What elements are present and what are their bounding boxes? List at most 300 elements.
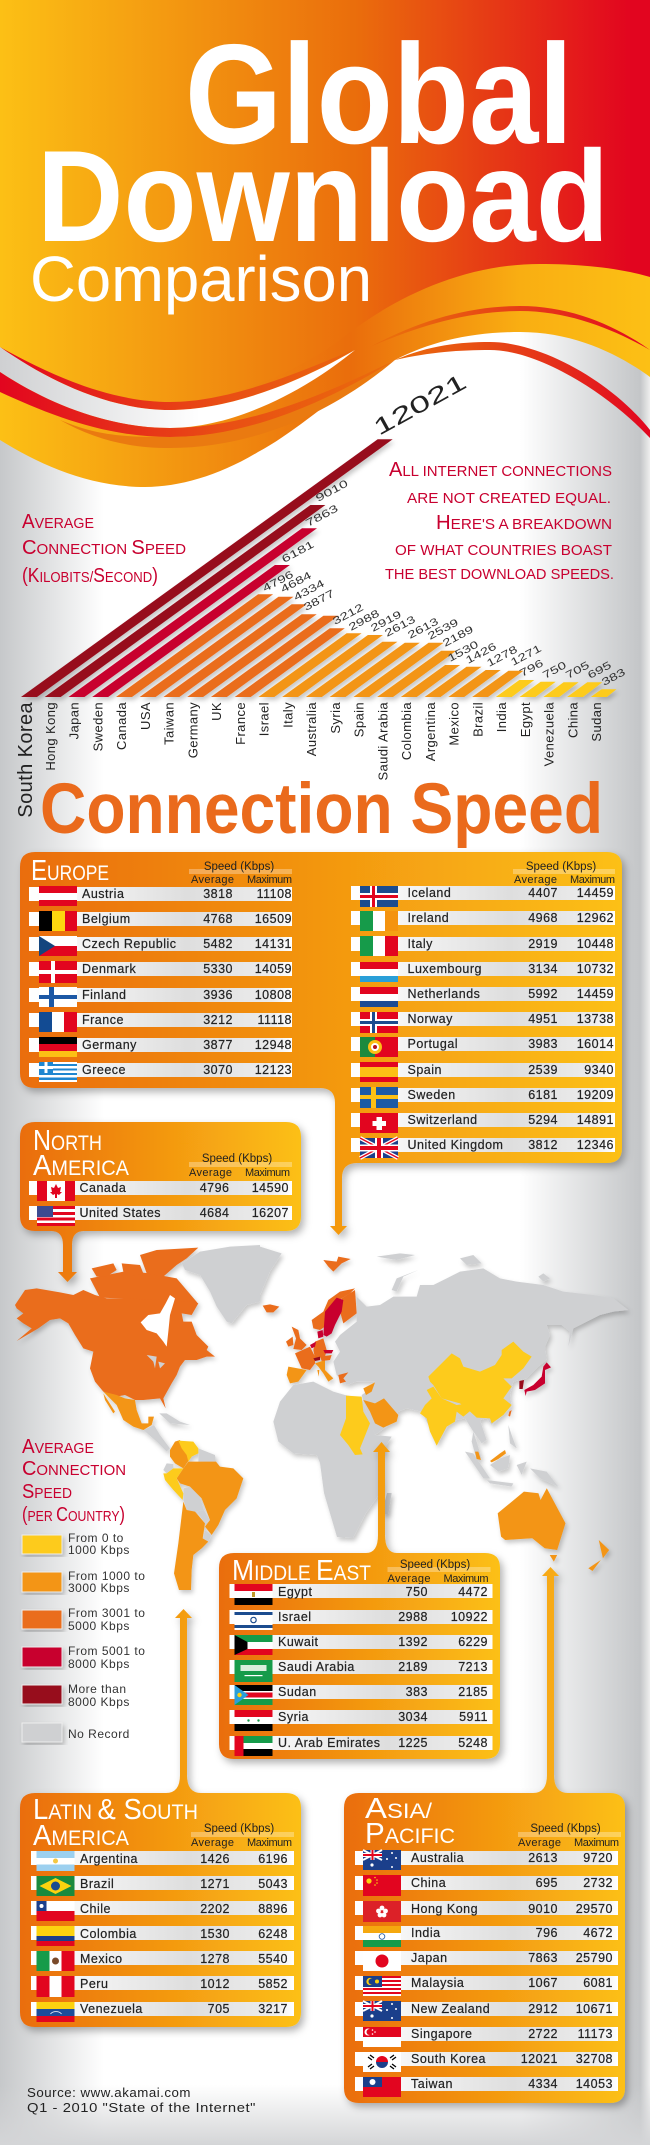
row: Sweden	[351, 1087, 615, 1108]
bar value labels: 2613	[383, 613, 418, 640]
row: Venezuela: Venezuela	[80, 2002, 143, 2016]
row: Greece: Greece	[82, 1063, 126, 1077]
row: Brazil: 1271	[200, 1877, 230, 1891]
bar country labels: UK	[209, 702, 224, 721]
row: Argentina: 6196	[258, 1852, 288, 1866]
row: China: 2732	[583, 1876, 613, 1890]
row: Sweden: 19209	[577, 1088, 614, 1102]
icon: flag Saudi Arabia	[234, 1660, 272, 1682]
row: Sweden: 6181	[528, 1088, 558, 1102]
row: Greece: 3070	[203, 1063, 233, 1077]
row: Brazil: Brazil	[80, 1877, 114, 1891]
row: Portugal: 3983	[528, 1037, 558, 1051]
icon: flag Singapore	[363, 2027, 401, 2047]
row: Israel: 2988	[398, 1610, 428, 1624]
icon: flag Peru	[36, 1976, 74, 1997]
bar country labels: Italy	[280, 702, 295, 728]
source note: Source: www.akamai.com	[27, 2085, 191, 2100]
row: Spain	[351, 1062, 615, 1082]
row: Spain: Spain	[408, 1063, 442, 1077]
legend item: no record	[22, 1723, 130, 1742]
row: New Zealand	[355, 2001, 618, 2021]
icon: flag United States	[37, 1206, 75, 1226]
intro text: HERE'S A BREAKDOWN	[436, 512, 612, 534]
row: Sudan: 383	[406, 1685, 428, 1699]
row: Malaysia: 1067	[528, 1976, 558, 1990]
row: Czech Republic: 5482	[203, 937, 233, 951]
row: Peru	[31, 1976, 294, 1997]
bar chart: average connection speed	[15, 368, 628, 818]
row: Japan: 25790	[576, 1951, 613, 1965]
row: South Korea: South Korea	[411, 2052, 486, 2066]
row: Austria	[29, 886, 292, 906]
row: United Kingdom: 3812	[528, 1138, 558, 1152]
row: Australia: 9720	[583, 1851, 613, 1865]
icon: flag United Arab Emirates	[234, 1736, 272, 1756]
row: China: 695	[536, 1876, 558, 1890]
row: Canada	[29, 1181, 292, 1201]
row: Luxembourg: 10732	[577, 962, 614, 976]
icon: flag France	[39, 1012, 77, 1032]
row: Iceland	[351, 886, 615, 907]
bars	[21, 439, 616, 697]
panel: Europe: Average	[191, 874, 234, 886]
row: Mexico: Mexico	[80, 1952, 123, 1966]
row: Mexico: 5540	[258, 1952, 288, 1966]
bar value labels: 4796	[261, 568, 296, 595]
source note: Q1 - 2010 "State of the Internet"	[27, 2100, 256, 2115]
bar value labels: 750	[541, 659, 569, 682]
row: Sudan	[230, 1685, 492, 1705]
row: France	[29, 1012, 292, 1032]
title: Comparison	[30, 243, 372, 315]
row: Brazil	[31, 1876, 294, 1896]
row: U. Arab Emirates: 5248	[458, 1736, 488, 1750]
legend item: 0 to 1000: 1000 Kbps	[68, 1543, 130, 1557]
legend item: more than 8000	[22, 1682, 130, 1709]
chart caption: AVERAGE	[22, 511, 94, 533]
row: Sweden: Sweden	[408, 1088, 456, 1102]
row: Saudi Arabia: 2189	[398, 1660, 428, 1674]
icon: flag Australia	[363, 1850, 401, 1870]
bar country labels: China	[565, 702, 580, 738]
map: South America	[163, 1440, 243, 1590]
row: Chile: 8896	[258, 1902, 288, 1916]
row: Australia	[355, 1850, 618, 1870]
legend item: no record: No Record	[68, 1727, 130, 1741]
row: Singapore: 11173	[578, 2027, 613, 2041]
icon: flag Sweden	[360, 1087, 398, 1108]
icon: flag Chile	[36, 1901, 74, 1921]
row: Chile: Chile	[80, 1902, 111, 1916]
row: Denmark: 5330	[203, 962, 233, 976]
row: Italy	[351, 936, 615, 956]
row: Chile	[31, 1901, 294, 1921]
row: U. Arab Emirates	[230, 1736, 492, 1756]
row: France: 11118	[258, 1013, 292, 1027]
row: Switzerland: Switzerland	[408, 1113, 478, 1127]
bar country labels: Israel	[257, 702, 272, 736]
icon: flag Egypt	[234, 1584, 272, 1605]
row: Kuwait: Kuwait	[278, 1635, 319, 1649]
row: China: China	[411, 1876, 446, 1890]
icon: flag Kuwait	[234, 1635, 272, 1655]
row: Peru: 5852	[258, 1977, 288, 1991]
row: New Zealand: 2912	[528, 2002, 558, 2016]
icon: flag Colombia	[36, 1926, 74, 1946]
bar value labels: 1271	[509, 642, 544, 669]
row: China	[355, 1875, 618, 1896]
row: Luxembourg: Luxembourg	[408, 962, 482, 976]
bar value labels: 9010	[314, 478, 351, 505]
icon: flag Japan	[363, 1951, 401, 1971]
row: Czech Republic: 14131	[255, 937, 292, 951]
row: Kuwait: 1392	[398, 1635, 428, 1649]
row: Hong Kong: Hong Kong	[411, 1902, 478, 1916]
row: Ireland: 12962	[577, 911, 614, 925]
row: Portugal: 16014	[577, 1037, 614, 1051]
map: Oceania	[498, 1488, 609, 1571]
row: Iceland: 4407	[528, 886, 558, 900]
bar value labels	[261, 368, 628, 689]
panel: Asia Pacific: Speed (Kbps)	[530, 1823, 601, 1835]
legend item: 1000 to 3000	[22, 1569, 145, 1595]
legend item: 1000 to 3000: 3000 Kbps	[68, 1581, 130, 1595]
icon: flag Czech Republic	[39, 936, 77, 956]
row: Peru: Peru	[80, 1977, 108, 1991]
icon: flag South Korea	[363, 2052, 401, 2072]
row: Venezuela	[31, 2002, 294, 2022]
row: Italy: Italy	[408, 937, 433, 951]
row: Kuwait	[230, 1635, 492, 1655]
row: Venezuela: 705	[208, 2002, 230, 2016]
panel: Europe: Maximum	[247, 874, 292, 886]
row: Netherlands	[351, 987, 615, 1007]
row: Finland: 10808	[255, 988, 292, 1002]
row: Ireland: Ireland	[408, 911, 449, 925]
row: Hong Kong: 9010	[528, 1902, 558, 1916]
icon: flag Spain	[360, 1062, 398, 1082]
row: Sudan: Sudan	[278, 1685, 317, 1699]
icon: flag China	[363, 1875, 401, 1896]
icon: flag New Zealand	[363, 2001, 401, 2021]
bar country labels: USA	[138, 702, 153, 730]
row: Chile: 2202	[200, 1902, 230, 1916]
row: India: 796	[536, 1926, 558, 1940]
icon: flag Venezuela	[36, 2002, 74, 2022]
bar country labels: Spain	[352, 702, 367, 737]
intro text: OF WHAT COUNTRIES BOAST	[395, 542, 612, 559]
row: Syria: 5911	[459, 1710, 488, 1724]
chart caption	[22, 511, 186, 587]
bar country labels: Saudi Arabia	[375, 702, 390, 781]
panel: Europe: EUROPE	[31, 855, 109, 887]
row: Spain: 2539	[528, 1063, 558, 1077]
bar value labels: 1530	[446, 638, 481, 665]
legend item: 0 to 1000	[22, 1531, 130, 1557]
row: Denmark: Denmark	[82, 962, 136, 976]
row: United States: 4684	[200, 1206, 230, 1220]
row: Mexico	[31, 1951, 294, 1971]
icon: flag Finland	[39, 987, 77, 1007]
row: Australia: 2613	[528, 1851, 558, 1865]
bar value labels: 2919	[369, 608, 404, 635]
icon: flag Syria	[234, 1710, 272, 1731]
row: Kuwait: 6229	[458, 1635, 488, 1649]
intro text	[385, 459, 614, 583]
bar country labels: Japan	[67, 702, 82, 739]
row: Japan: Japan	[411, 1951, 448, 1965]
panel: Asia Pacific: PACIFIC	[365, 1818, 455, 1850]
row: Norway	[351, 1012, 615, 1033]
icon: flag Israel	[234, 1610, 272, 1630]
legend: average connection speed per country	[22, 1436, 145, 1742]
title	[30, 15, 609, 315]
bar value labels: 796	[518, 657, 546, 680]
row: Denmark: 14059	[255, 962, 292, 976]
row: Egypt: 750	[406, 1585, 428, 1599]
row: Italy: 10448	[577, 937, 614, 951]
row: Norway: Norway	[408, 1012, 453, 1026]
bar country labels: Taiwan	[162, 702, 177, 745]
chart caption: CONNECTION SPEED	[22, 537, 186, 559]
row: Switzerland: 14891	[577, 1113, 614, 1127]
row: Norway: 13738	[577, 1012, 614, 1026]
row: Iceland: Iceland	[408, 886, 451, 900]
bar country labels: Colombia	[399, 702, 414, 760]
row: Belgium: Belgium	[82, 912, 131, 926]
panel: Latin and South America: Maximum	[247, 1837, 292, 1849]
row: Netherlands: 14459	[577, 987, 614, 1001]
row: Ireland	[351, 911, 615, 931]
panel: Latin and South America: Average	[191, 1837, 234, 1849]
row: Malaysia: Malaysia	[411, 1976, 464, 1990]
row: Canada: 4796	[200, 1181, 230, 1195]
bar country labels: Germany	[185, 702, 200, 758]
row: Colombia	[31, 1926, 294, 1946]
row: Singapore: 2722	[528, 2027, 558, 2041]
row: Israel: Israel	[278, 1610, 312, 1624]
icon: flag Canada	[37, 1181, 75, 1201]
row: Venezuela: 3217	[258, 2002, 288, 2016]
row: Germany: 12948	[255, 1038, 292, 1052]
row: U. Arab Emirates: 1225	[398, 1736, 428, 1750]
row: Austria: 11108	[257, 887, 292, 901]
row: Egypt: Egypt	[278, 1585, 312, 1599]
bar country labels: Syria	[328, 702, 343, 734]
legend item: 5001 to 8000	[22, 1644, 145, 1671]
row: Czech Republic	[29, 936, 292, 956]
panel: Europe: Average	[514, 874, 557, 886]
bar value labels: 2189	[441, 623, 476, 650]
row: Finland: 3936	[203, 988, 233, 1002]
legend item: 3001 to 5000: 5000 Kbps	[68, 1619, 130, 1633]
panel: Middle East: MIDDLE EAST	[232, 1555, 371, 1587]
row: Israel	[230, 1610, 492, 1630]
row: Germany: 3877	[203, 1038, 233, 1052]
row: Brazil: 5043	[258, 1877, 288, 1891]
row: Egypt: 4472	[458, 1585, 488, 1599]
row: Canada: Canada	[80, 1181, 126, 1195]
row: Saudi Arabia	[230, 1660, 492, 1682]
bar value labels: 12021	[369, 368, 471, 440]
row: Egypt	[230, 1584, 492, 1605]
bar value labels: 705	[564, 659, 592, 682]
row: Syria: Syria	[278, 1710, 309, 1724]
row: New Zealand: New Zealand	[411, 2002, 490, 2016]
panel: Europe: Speed (Kbps)	[526, 861, 596, 873]
row: Netherlands: Netherlands	[408, 987, 480, 1001]
legend: average connection speed per country: AVERAGE	[22, 1436, 94, 1458]
row: Spain: 9340	[584, 1063, 614, 1077]
legend item: 5001 to 8000: 8000 Kbps	[68, 1657, 130, 1671]
panel: Latin and South America: LATIN & SOUTH	[33, 1794, 198, 1826]
row: South Korea: 32708	[576, 2052, 613, 2066]
icon: flag Portugal	[360, 1037, 398, 1057]
panel: North America: Speed (Kbps)	[202, 1153, 272, 1165]
row: Argentina	[31, 1851, 294, 1871]
bar value labels: 695	[586, 659, 614, 682]
row: Ireland: 4968	[528, 911, 558, 925]
bar country labels: Canada	[114, 702, 129, 750]
row: Luxembourg	[351, 962, 615, 982]
row: Iceland: 14459	[577, 886, 614, 900]
bar value labels: 1426	[464, 640, 499, 667]
icon: flag Italy	[360, 936, 398, 956]
row: United Kingdom: United Kingdom	[408, 1138, 503, 1152]
row: Hong Kong: 29570	[576, 1902, 613, 1916]
legend: average connection speed per country: (PER COUNTRY)	[22, 1504, 125, 1526]
bar value labels: 383	[600, 666, 628, 689]
row: India: India	[411, 1926, 441, 1940]
row: Singapore: Singapore	[411, 2027, 472, 2041]
panel: Asia Pacific: Average	[518, 1837, 561, 1849]
panel: North America	[20, 1122, 301, 1282]
bar value labels: 1278	[485, 643, 520, 670]
row: Saudi Arabia: Saudi Arabia	[278, 1660, 355, 1674]
panel: Asia Pacific: Maximum	[574, 1837, 619, 1849]
title: Global	[185, 15, 573, 174]
bar value labels: 2988	[347, 607, 382, 634]
row: Malaysia: 6081	[583, 1976, 613, 1990]
row: Argentina: 1426	[200, 1852, 230, 1866]
row: United Kingdom: 12346	[577, 1138, 614, 1152]
panel: Europe: Maximum	[570, 874, 615, 886]
panel: North America: Average	[189, 1167, 232, 1179]
icon: flag Luxembourg	[360, 962, 398, 982]
row: Colombia: 1530	[200, 1927, 230, 1941]
row: Taiwan: 4334	[528, 2077, 558, 2091]
row: Japan	[355, 1951, 618, 1971]
panel: Europe: Speed (Kbps)	[204, 861, 274, 873]
row: Japan: 7863	[528, 1951, 558, 1965]
row: Greece: 12123	[255, 1063, 292, 1077]
icon: flag Sudan	[234, 1685, 272, 1705]
panel: Middle East: Average	[388, 1573, 430, 1585]
row: Norway: 4951	[528, 1012, 558, 1026]
legend item: 3001 to 5000	[22, 1606, 145, 1633]
legend item: more than 8000: 8000 Kbps	[68, 1695, 130, 1709]
bar value labels: 7863	[304, 503, 341, 530]
bar value labels: 6181	[280, 539, 317, 566]
row: Switzerland: 5294	[528, 1113, 558, 1127]
icon: flag Iceland	[360, 886, 398, 907]
legend: average connection speed per country: CONNECTION	[22, 1458, 126, 1480]
bar value labels: 2539	[426, 616, 461, 643]
map: Eurasia and Africa	[260, 1247, 628, 1538]
row: Singapore	[355, 2027, 618, 2047]
row: Czech Republic: Czech Republic	[82, 937, 177, 951]
icon: flag India	[363, 1926, 401, 1947]
header wave banner	[0, 0, 650, 487]
legend item: 0 to 1000: From 0 to	[68, 1531, 124, 1545]
row: Austria: Austria	[82, 887, 124, 901]
bar country labels: Sudan	[589, 702, 604, 742]
intro text: ARE NOT CREATED EQUAL.	[407, 490, 611, 507]
icon: flag Germany	[39, 1037, 77, 1057]
row: United Kingdom	[351, 1138, 615, 1158]
row: Austria: 3818	[203, 887, 233, 901]
row: New Zealand: 10671	[576, 2002, 613, 2016]
legend item: more than 8000: More than	[68, 1682, 127, 1696]
row: Belgium: 4768	[203, 912, 233, 926]
bar country labels: France	[233, 702, 248, 745]
row: Taiwan: 14053	[576, 2077, 613, 2091]
map: North America	[15, 1245, 260, 1452]
icon: flag Argentina	[36, 1851, 74, 1871]
row: Sudan: 2185	[458, 1685, 488, 1699]
panel: North America: Maximum	[245, 1167, 290, 1179]
row: Hong Kong	[355, 1901, 618, 1922]
row: South Korea: 12021	[521, 2052, 558, 2066]
panel: Middle East: Speed (Kbps)	[400, 1559, 470, 1571]
row: France: 3212	[203, 1013, 233, 1027]
icon: flag Brazil	[36, 1876, 74, 1896]
icon: flag United Kingdom	[360, 1138, 398, 1158]
row: Colombia: Colombia	[80, 1927, 137, 1941]
icon: flag Denmark	[39, 961, 77, 983]
row: Malaysia	[355, 1976, 618, 1996]
title: Download	[37, 123, 609, 269]
heading: connection speed: Connection Speed	[40, 770, 603, 849]
panel: Middle East: Maximum	[444, 1573, 488, 1585]
bar country labels: Sweden	[90, 702, 106, 751]
bar value labels: 4334	[292, 577, 327, 604]
icon: flag Netherlands	[360, 987, 398, 1007]
icon: flag Taiwan	[363, 2077, 401, 2097]
row: Saudi Arabia: 7213	[458, 1660, 488, 1674]
row: U. Arab Emirates: U. Arab Emirates	[278, 1736, 380, 1750]
row: Luxembourg: 3134	[528, 962, 558, 976]
row: Taiwan	[355, 2077, 618, 2097]
legend: average connection speed per country: SPEED	[22, 1481, 72, 1503]
panel: Asia Pacific: ASIA/	[365, 1793, 432, 1825]
row: United States: 16207	[252, 1206, 289, 1220]
bar country labels: South Korea	[15, 702, 37, 818]
icon: flag Switzerland	[360, 1113, 398, 1133]
row: Canada: 14590	[252, 1181, 289, 1195]
icon: flag Malaysia	[363, 1976, 401, 1996]
bar value labels: 3212	[331, 601, 366, 628]
row: Germany	[29, 1037, 292, 1057]
panel: Latin and South America	[20, 1609, 301, 2027]
panel: North America: AMERICA	[33, 1150, 129, 1182]
row: United States	[29, 1206, 292, 1226]
row: Portugal: Portugal	[408, 1037, 458, 1051]
world map	[15, 1245, 628, 1590]
icon: flag Greece	[39, 1062, 77, 1082]
bar value labels: 2613	[406, 615, 441, 642]
